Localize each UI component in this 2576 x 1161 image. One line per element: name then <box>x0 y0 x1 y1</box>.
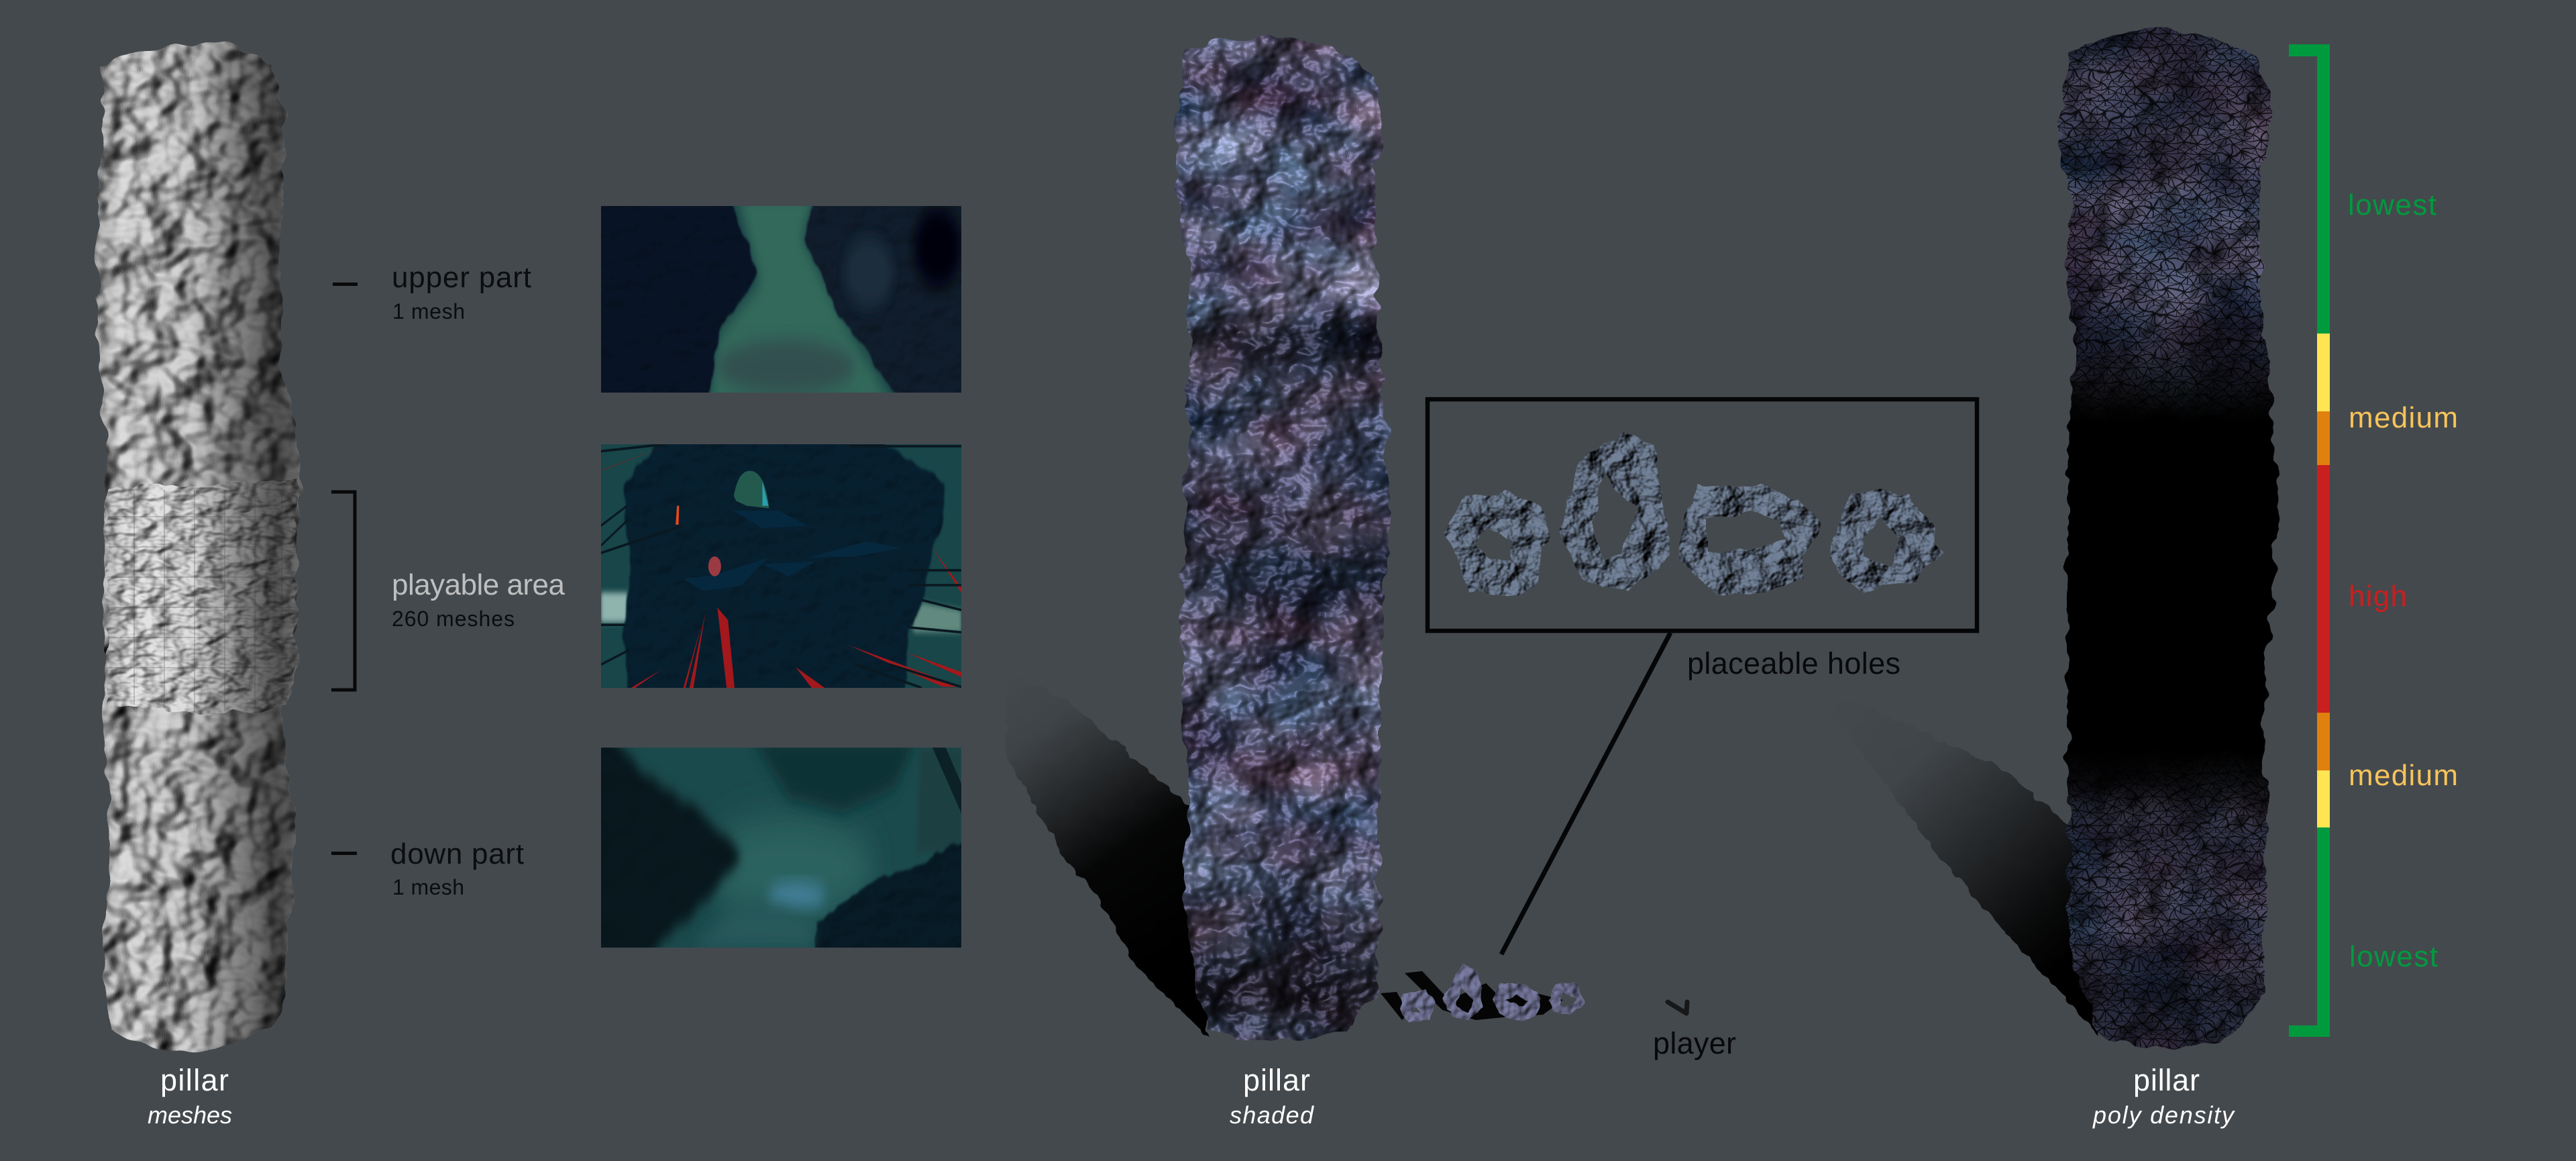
heading: playable area <box>392 568 566 601</box>
orange slit <box>676 506 679 525</box>
poly density scale bar <box>2289 44 2330 1037</box>
lowest: lowest <box>2349 940 2438 973</box>
caption: pillar poly density: poly density <box>2092 1101 2235 1129</box>
lowest segment <box>2317 44 2330 334</box>
bottom bracket cap <box>2289 1025 2330 1037</box>
caption: pillar poly density <box>2092 1063 2235 1129</box>
screenshot: playable area <box>601 444 961 688</box>
tick <box>333 283 358 286</box>
lowest segment <box>2317 827 2330 1037</box>
label: player: player <box>1653 1026 1736 1060</box>
scale labels <box>2348 189 2458 973</box>
caption: pillar shaded <box>1230 1063 1314 1129</box>
top bracket cap <box>2289 44 2330 56</box>
medium segment yellow <box>2317 770 2330 827</box>
mesh count: 1 mesh <box>392 299 465 323</box>
hole 4 <box>1829 491 1942 591</box>
cast shadow: poly density pillar <box>1811 685 2100 1037</box>
label: placeable holes: placeable holes <box>1687 646 1900 680</box>
pillar: meshes <box>96 43 302 1052</box>
tick <box>331 852 357 855</box>
pillar: shaded <box>1175 36 1389 1044</box>
caption: pillar shaded: shaded <box>1230 1101 1314 1129</box>
medium segment orange <box>2317 411 2330 465</box>
inset box: placeable holes <box>1428 399 1977 631</box>
red streaks <box>601 445 961 688</box>
dark cables <box>601 444 961 688</box>
playable section grid <box>107 490 295 711</box>
label: playable area <box>331 492 566 690</box>
clay pillar body <box>96 43 302 1052</box>
small holes <box>1401 964 1586 1022</box>
heading: upper part <box>392 261 531 294</box>
caption: pillar meshes: meshes <box>148 1101 232 1129</box>
mesh count: 260 meshes <box>392 607 515 631</box>
high segment <box>2317 465 2330 713</box>
label: down part <box>331 838 524 899</box>
screenshot: down part <box>601 748 961 948</box>
medium: medium <box>2349 401 2458 434</box>
tower <box>916 748 961 853</box>
box frame <box>1428 399 1977 631</box>
label: upper part <box>333 261 531 323</box>
mesh count: 1 mesh <box>392 875 464 899</box>
medium segment yellow <box>2317 334 2330 411</box>
mist patches <box>601 593 961 632</box>
callout line <box>1501 633 1670 954</box>
screenshot: upper part <box>601 206 961 393</box>
hole 1 <box>1446 491 1548 597</box>
hole meshes <box>1446 432 1942 597</box>
central rock mass <box>623 426 946 704</box>
caption: pillar meshes: pillar <box>160 1063 229 1097</box>
character <box>708 556 721 576</box>
pillar: poly density <box>2057 28 2279 1048</box>
lowest: lowest <box>2348 189 2436 221</box>
icon: player <box>1668 1002 1687 1013</box>
caption: pillar shaded: pillar <box>1243 1063 1310 1097</box>
hole shadows <box>1381 971 1563 1020</box>
medium: medium <box>2349 759 2458 792</box>
cave opening <box>734 471 769 508</box>
cast shadow: shaded pillar <box>1006 670 1208 1039</box>
hole 2 <box>1559 432 1670 593</box>
playable section of the clay pillar <box>106 481 299 714</box>
heading: down part <box>390 838 524 870</box>
bracket <box>331 492 355 690</box>
high: high <box>2349 580 2407 613</box>
hole 3 <box>1676 483 1821 596</box>
medium segment orange <box>2317 713 2330 770</box>
caption: pillar meshes <box>148 1063 232 1129</box>
placed holes with shadows <box>1381 964 1586 1022</box>
caption: pillar poly density: pillar <box>2133 1063 2200 1097</box>
platforms <box>683 511 900 591</box>
